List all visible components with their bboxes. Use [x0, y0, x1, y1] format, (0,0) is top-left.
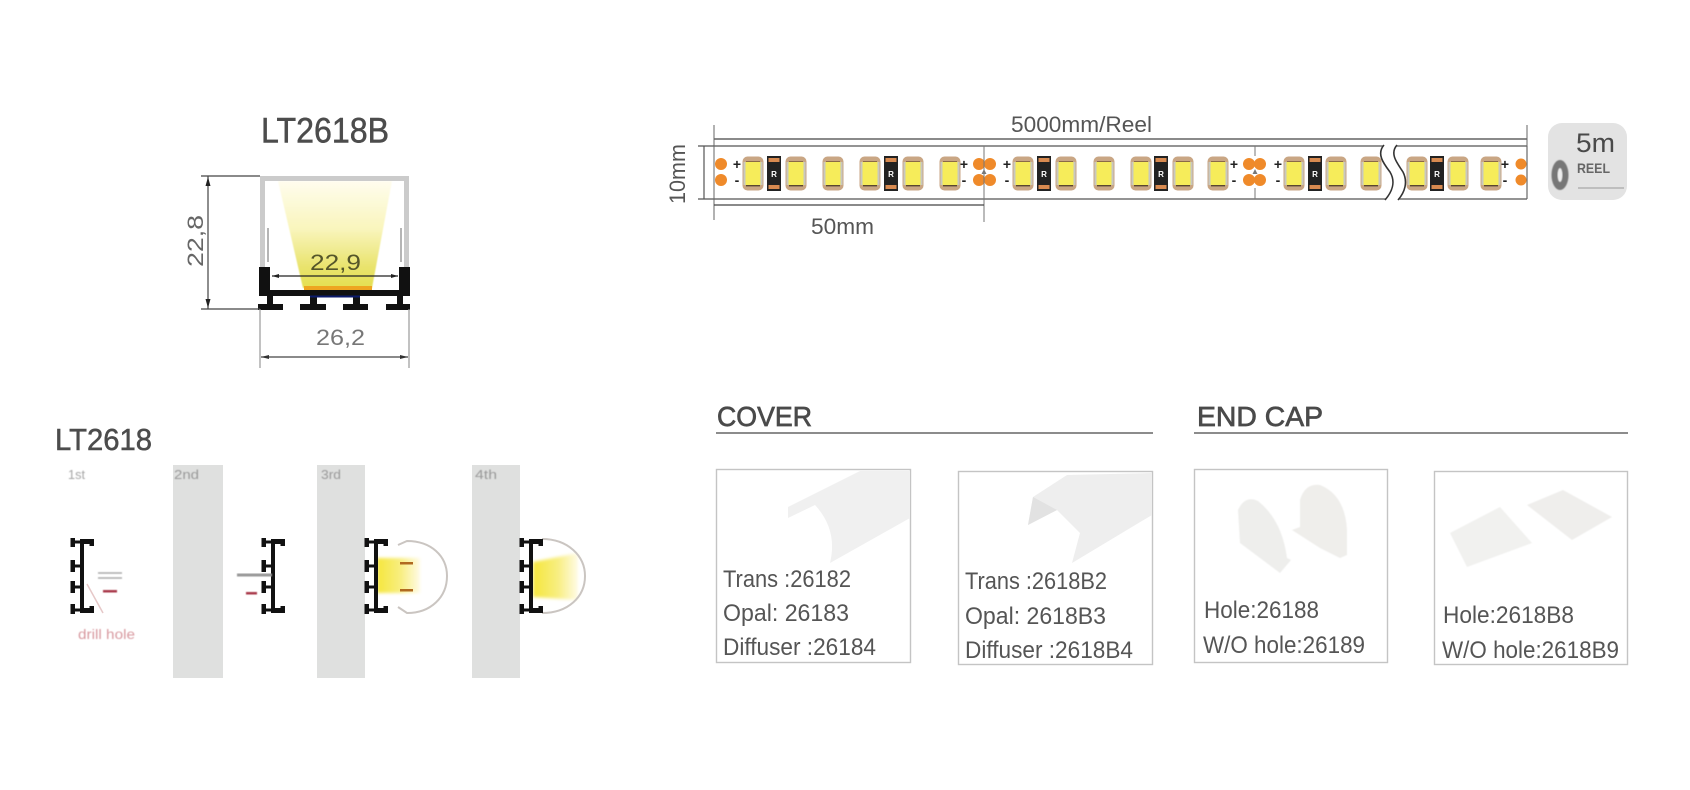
diagram: LT2618B profile cross-section: 26,2	[316, 325, 365, 350]
polarity marks: -	[1276, 172, 1281, 188]
step 1: drill hole: drill hole	[78, 626, 135, 642]
polarity marks: -	[962, 172, 967, 188]
polarity marks: +	[733, 156, 741, 172]
polarity marks: +	[1003, 156, 1011, 172]
resistors: R	[1158, 170, 1164, 179]
polarity marks: -	[1503, 172, 1508, 188]
step 4: installed profile: 4th	[475, 467, 497, 482]
title: LT2618B: LT2618B	[261, 112, 389, 150]
step 2: wall and screw: 2nd	[174, 467, 199, 482]
dimension: 5000mm/Reel: 5000mm/Reel	[1011, 112, 1152, 137]
step 3: wall, profile and cover fitting	[317, 465, 447, 678]
dimension 22,8	[201, 176, 260, 309]
resistors: R	[771, 170, 777, 179]
panel: cover 2618B2: Trans :2618B2	[965, 568, 1107, 595]
pads	[715, 158, 1526, 186]
badge: 5m reel: REEL	[1577, 160, 1610, 176]
step 2: wall and screw	[173, 465, 285, 678]
polarity marks: +	[1501, 156, 1509, 172]
step 3: wall, profile and cover fitting: 3rd	[321, 467, 341, 482]
dimension 22,9	[272, 275, 398, 277]
panel: cover 26182	[716, 470, 910, 662]
polarity marks: -	[735, 172, 740, 188]
black aluminium profile	[258, 267, 410, 310]
panel: end cap 26188: Hole:26188	[1204, 597, 1319, 624]
heading: COVER: COVER	[717, 401, 812, 432]
panel: cover 26182: Opal: 26183	[723, 600, 849, 627]
polarity marks	[733, 156, 1509, 188]
resistors	[767, 156, 1444, 191]
dimension: 10mm	[665, 144, 714, 220]
step 1: drill hole: 1st	[68, 467, 85, 482]
panel: end cap 26188: W/O hole:26189	[1203, 632, 1365, 659]
heading: END CAP: END CAP	[1197, 401, 1323, 432]
badge: 5m reel	[1548, 123, 1627, 200]
step 4: installed profile	[472, 465, 585, 678]
panel: end cap 26188	[1194, 470, 1388, 662]
polarity marks: -	[1232, 172, 1237, 188]
panel: end cap 2618B8: Hole:2618B8	[1443, 602, 1574, 629]
break in strip	[1381, 144, 1405, 201]
panel: cover 2618B2: Diffuser :2618B4	[965, 637, 1133, 664]
panel: cover 2618B2	[958, 472, 1152, 664]
diagram: LT2618B profile cross-section	[183, 176, 410, 368]
panel: cover 2618B2: Opal: 2618B3	[965, 603, 1106, 630]
diagram: LT2618B profile cross-section: 22,9	[310, 250, 361, 275]
polarity marks: +	[1230, 156, 1238, 172]
resistors: R	[1041, 170, 1047, 179]
diffuser cover outline	[262, 178, 406, 296]
LED strip drawing	[714, 144, 1527, 222]
resistors: R	[1312, 170, 1318, 179]
light beam	[278, 181, 392, 288]
diagram: LT2618B profile cross-section: 22,8	[183, 215, 208, 267]
badge: 5m reel: 5m	[1576, 128, 1615, 158]
dimension: 5000mm/Reel	[714, 112, 1527, 146]
dimension: 50mm: 50mm	[811, 214, 874, 239]
panel: cover 26182: Trans :26182	[723, 566, 851, 593]
resistors: R	[888, 170, 894, 179]
LEDs	[742, 156, 1502, 190]
panel: end cap 2618B8: W/O hole:2618B9	[1442, 637, 1619, 664]
cut marks	[984, 146, 1255, 222]
dimension 26,2	[260, 309, 409, 368]
resistors: R	[1434, 170, 1440, 179]
dimension: 10mm: 10mm	[665, 144, 690, 204]
panel: end cap 2618B8	[1434, 472, 1628, 664]
title: LT2618: LT2618	[55, 422, 152, 457]
polarity marks: -	[1005, 172, 1010, 188]
panel: cover 26182: Diffuser :26184	[723, 634, 876, 661]
polarity marks: +	[1274, 156, 1282, 172]
orange LED strip	[304, 286, 372, 290]
strip outline	[714, 146, 1527, 199]
step 1: drill hole	[68, 467, 135, 642]
polarity marks: +	[960, 156, 968, 172]
